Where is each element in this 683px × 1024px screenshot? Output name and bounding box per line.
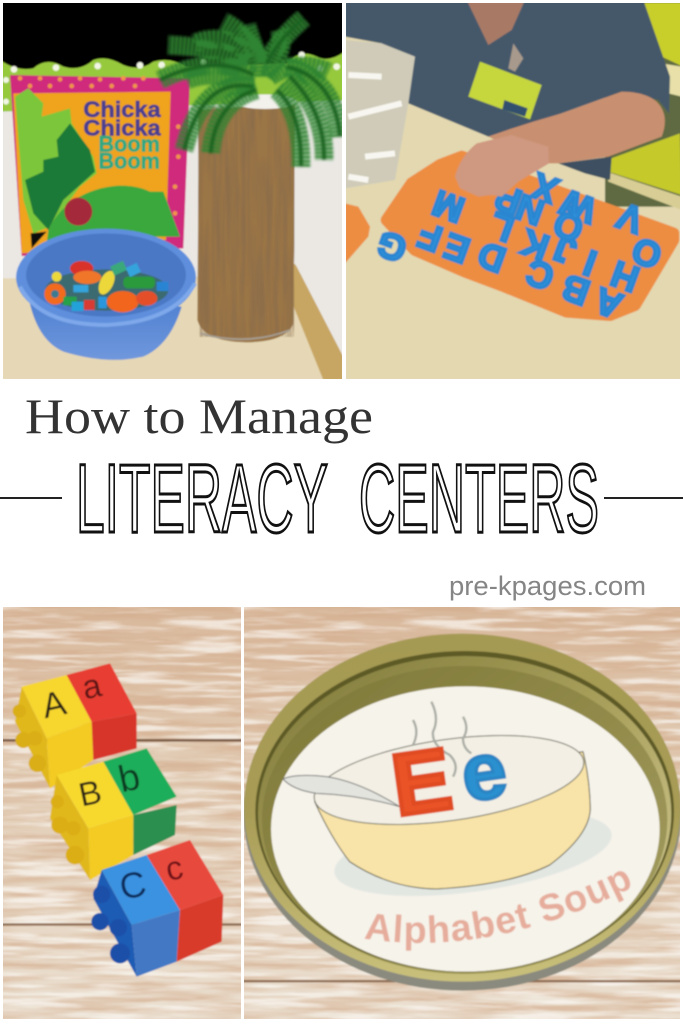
orange letter E: E <box>386 729 457 834</box>
soup bowl shadow <box>329 796 617 911</box>
blue foam letters: N <box>511 186 550 234</box>
neck <box>467 0 525 45</box>
block: B b: B <box>76 774 105 814</box>
blue foam letters: M <box>427 182 470 231</box>
clip <box>508 43 523 72</box>
steam <box>413 702 471 777</box>
blue foam letters: D <box>472 233 511 281</box>
spoon <box>283 775 400 807</box>
scalloped green border <box>0 50 347 112</box>
title: Literacy Centers: LITERACY <box>76 444 328 553</box>
photo: alphabet soup lid activity <box>244 607 680 1019</box>
wall <box>0 0 347 380</box>
block: A a: A <box>39 683 70 726</box>
plastic bag <box>345 40 415 188</box>
blue shirt <box>345 0 670 137</box>
wood background <box>0 605 247 1024</box>
book title text: Boom <box>98 149 160 174</box>
title: Literacy Centers <box>0 444 683 553</box>
paper circle <box>271 686 660 972</box>
book title text: Chicka <box>83 97 161 122</box>
Alphabet Soup label: Alphabet Soup <box>364 870 631 952</box>
id badge <box>468 62 542 119</box>
blue foam letters: E <box>438 225 475 272</box>
block: C c: C <box>116 862 150 908</box>
blue foam letters: Q <box>548 202 589 251</box>
blue foam letters: O <box>626 229 667 277</box>
photo: book, letter bowl and fern <box>3 3 342 379</box>
blue foam letters: J <box>548 227 582 273</box>
photo: lego blocks with matching letters <box>3 607 241 1019</box>
book title text: Chicka <box>83 115 161 140</box>
book title text: Boom <box>98 131 160 156</box>
black bulletin board <box>0 0 347 73</box>
table top <box>0 263 347 380</box>
book: Chicka Chicka Boom Boom <box>10 75 190 256</box>
blue foam letters: B <box>556 266 595 314</box>
book title text <box>83 97 161 174</box>
yellow bins <box>605 0 683 210</box>
wood background <box>243 605 683 1024</box>
blue foam letters: L <box>484 204 519 250</box>
block: B b <box>50 748 177 880</box>
block: A a <box>13 663 137 788</box>
table rail <box>288 263 347 380</box>
blue foam letters: X <box>526 165 564 212</box>
cylinder wrapped in wood grain <box>197 94 297 342</box>
fern <box>160 18 340 167</box>
blue foam letters: V <box>611 195 649 242</box>
blue bowl with magnetic letters <box>16 229 196 360</box>
blue foam letters: P <box>490 176 527 223</box>
blue foam letters: W <box>555 181 602 232</box>
blue foam letters: G <box>371 222 412 271</box>
photo: child sorting blue letters on orange tray <box>346 3 680 379</box>
blue letter e: e <box>456 724 512 819</box>
blue foam letters <box>371 165 667 327</box>
soup bowl <box>309 721 590 889</box>
block: C c <box>91 840 223 977</box>
website credit: pre-kpages.com <box>449 571 646 601</box>
blue foam letters: I <box>578 242 602 284</box>
blue foam letters: K <box>515 221 555 269</box>
blue foam letters: H <box>606 253 645 300</box>
blue foam letters: C <box>521 251 560 299</box>
colourful plastic letters <box>44 261 168 312</box>
blue foam letters: F <box>413 214 448 260</box>
table <box>345 0 683 380</box>
block: A a: a <box>79 667 105 707</box>
block: C c: c <box>162 849 186 889</box>
blue foam letters: A <box>589 279 628 327</box>
hand <box>455 135 549 197</box>
heading: How to Manage: How to Manage <box>25 388 373 444</box>
metal lid <box>243 634 681 991</box>
orange letter tray <box>387 157 673 315</box>
arm <box>488 92 665 163</box>
block: B b: b <box>115 755 144 800</box>
